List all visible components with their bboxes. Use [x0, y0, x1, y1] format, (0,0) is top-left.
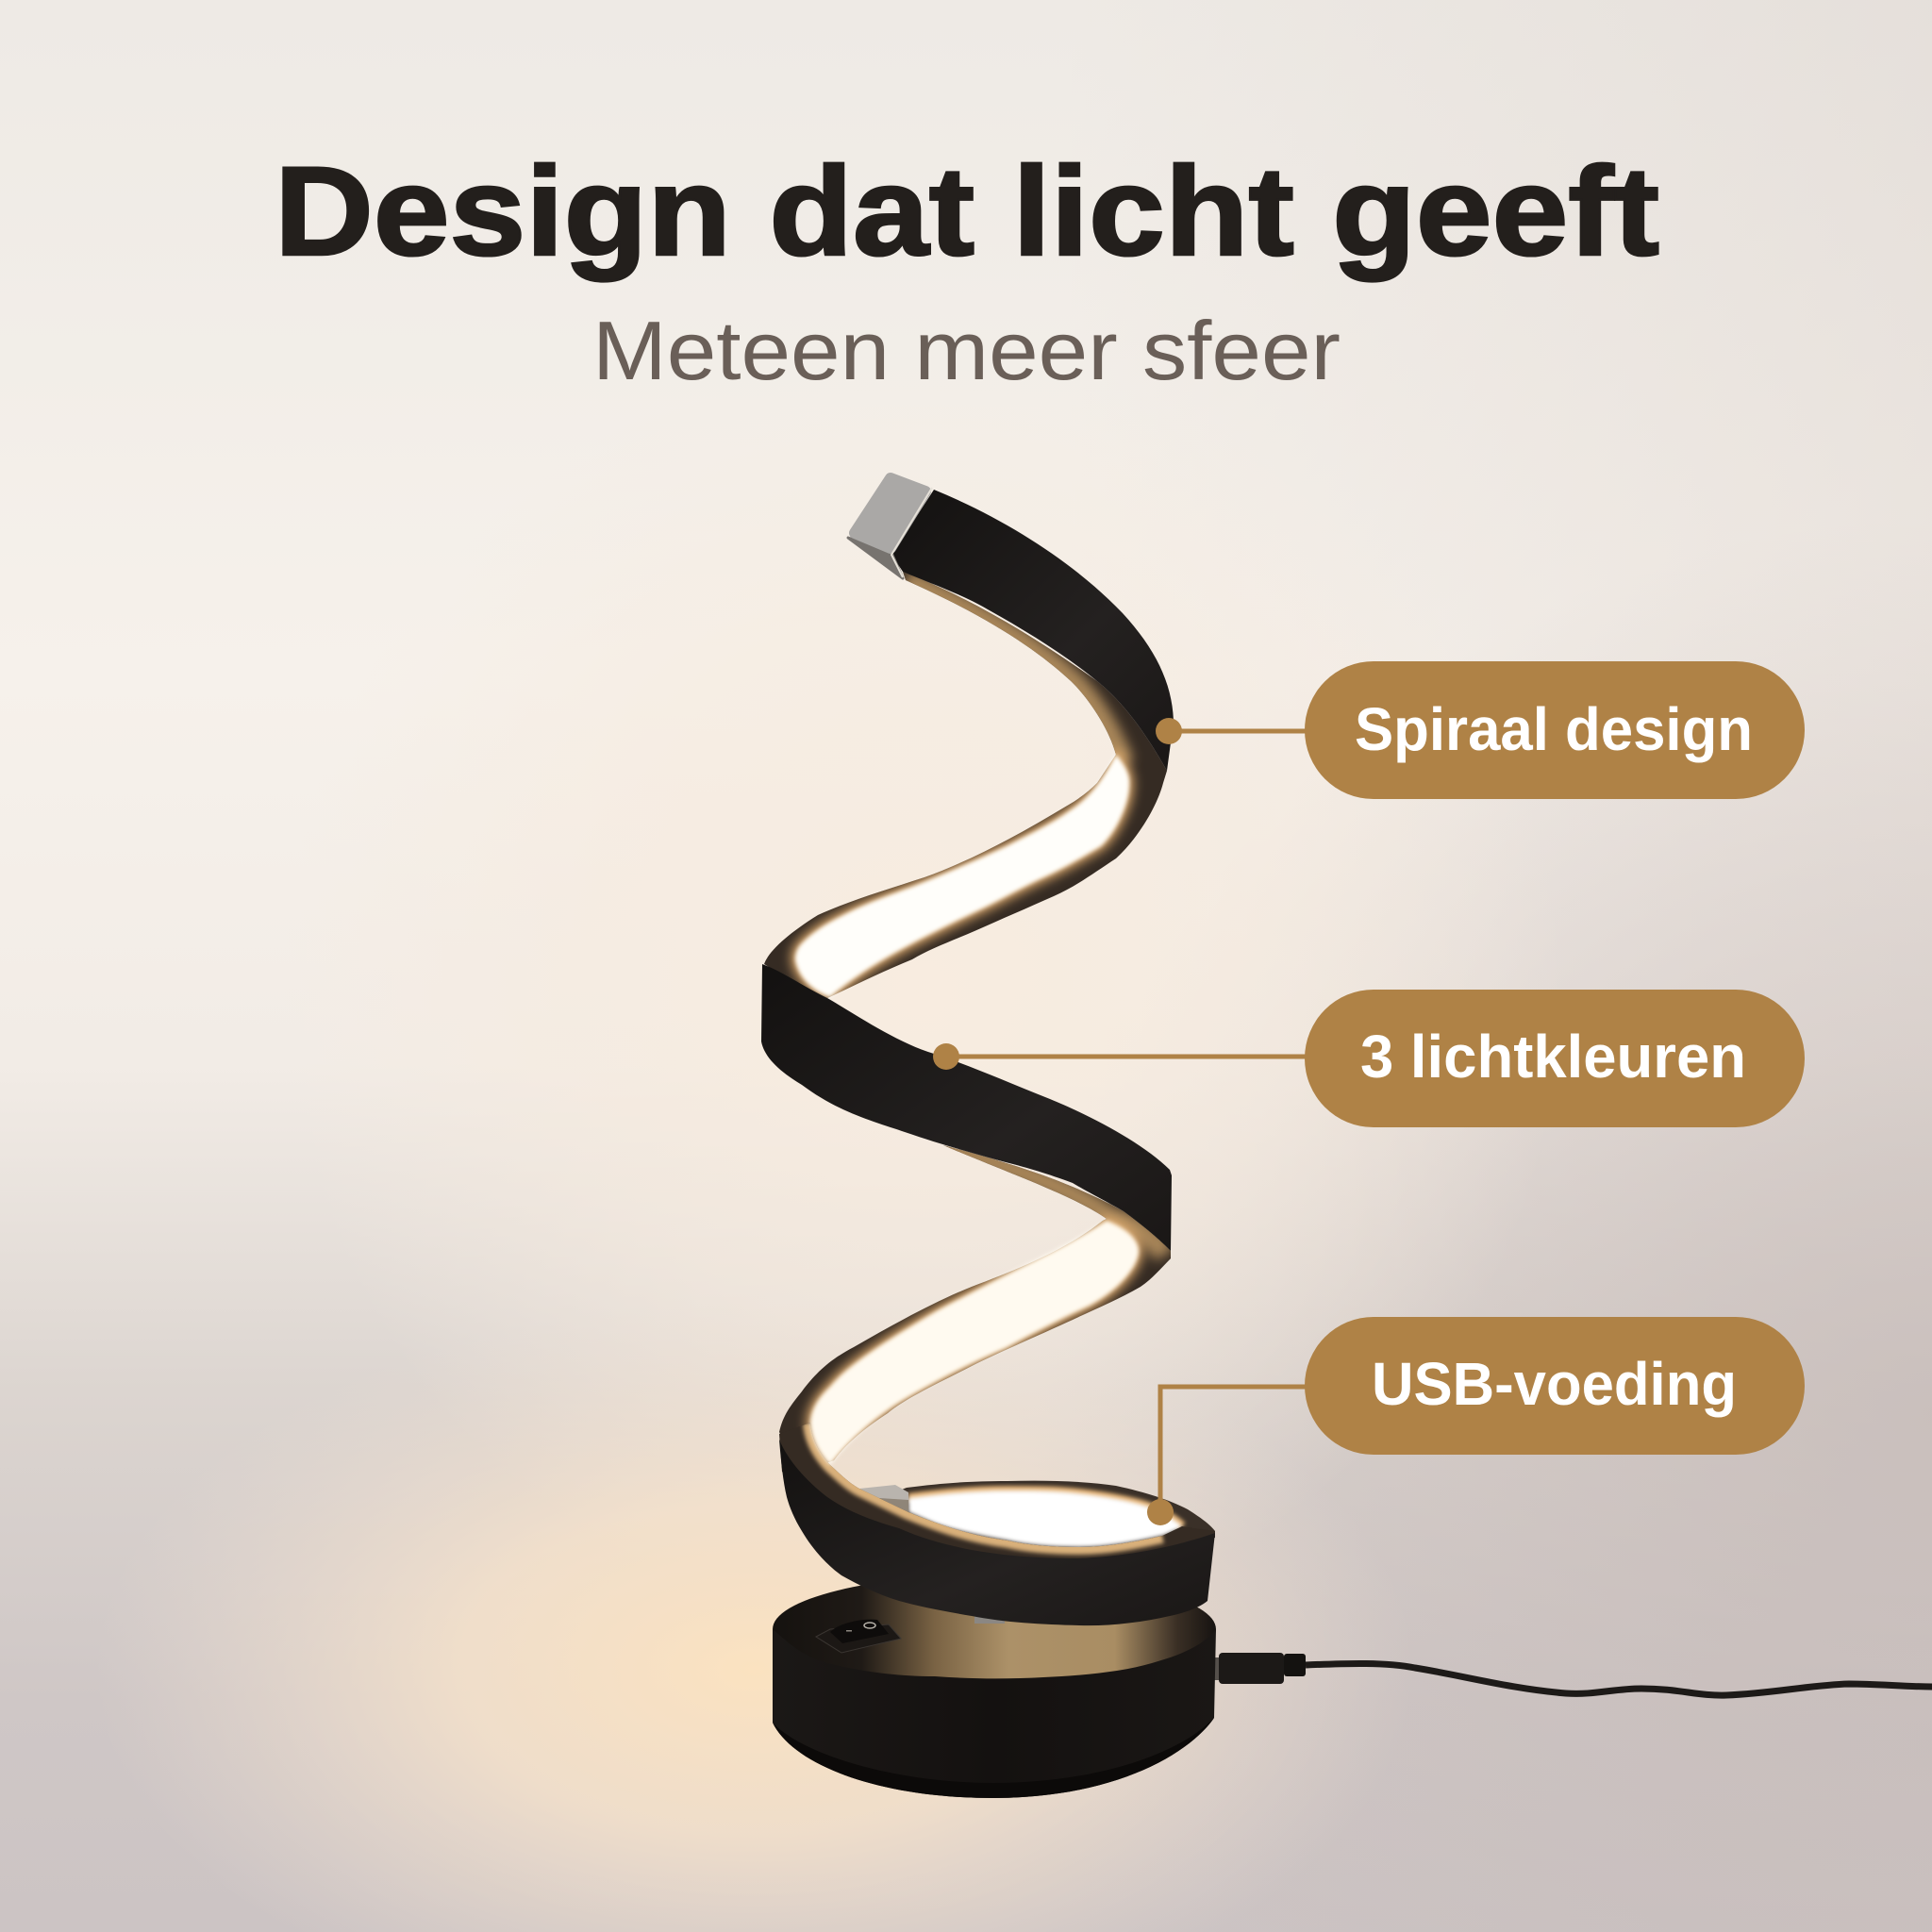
callout: Spiraal design [1156, 661, 1805, 799]
spiral lamp [761, 478, 1216, 1798]
lower spiral underside and rim [779, 1145, 1171, 1472]
top black band [891, 490, 1174, 771]
callout: USB-voeding: USB-voeding [1372, 1350, 1737, 1418]
lower ring top surface with light [879, 1481, 1215, 1547]
callout: 3 lichtkleuren: 3 lichtkleuren [1360, 1023, 1746, 1091]
small end cap [859, 1485, 908, 1512]
callout: Spiraal design: Spiraal design [1355, 695, 1753, 763]
middle black band [761, 964, 1172, 1251]
callout: 3 lichtkleuren [933, 990, 1805, 1127]
bottom ring inner strip [779, 1423, 1215, 1566]
subtitle: Meteen meer sfeer [592, 304, 1341, 397]
upper spiral underside and rim [764, 572, 1167, 998]
upper light strip [795, 755, 1129, 997]
callout: USB-voeding [1147, 1317, 1805, 1525]
metal post [974, 1615, 1005, 1624]
lower light strip [810, 1221, 1139, 1465]
bottom ring band [779, 1440, 1215, 1625]
title: Design dat licht geeft [275, 142, 1659, 282]
lamp base [773, 1574, 1216, 1798]
USB cable [1212, 1653, 1932, 1695]
rocker switch [816, 1620, 901, 1653]
silver end cap [848, 478, 932, 578]
